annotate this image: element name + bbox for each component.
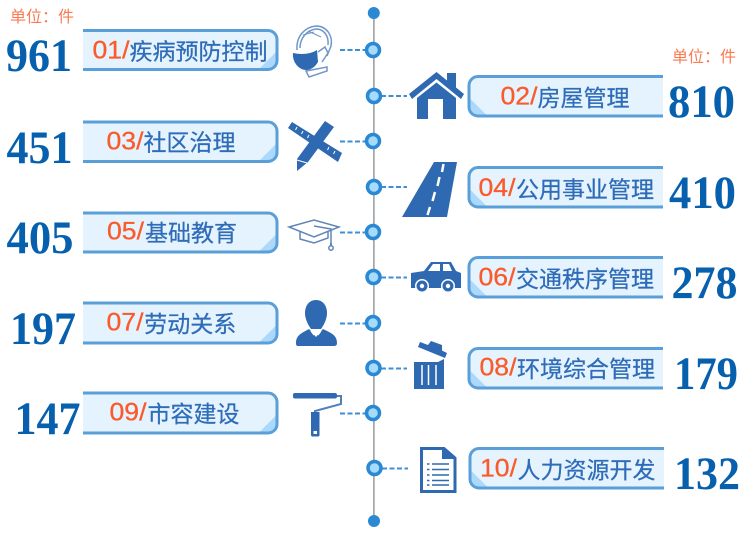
node 01 (366, 44, 380, 56)
pill 01: 01/ (92, 36, 130, 64)
pill 07: 劳动关系 (144, 311, 236, 337)
icon: trash can (414, 341, 447, 389)
pill 03 (83, 122, 277, 162)
pill 06: 06/ (478, 264, 516, 292)
timeline spine (368, 7, 380, 527)
icon: house (409, 72, 464, 119)
connector 10 (382, 468, 408, 470)
icon: person (296, 300, 337, 346)
node 06 (367, 270, 380, 284)
node 07 (366, 316, 380, 330)
node 09 (366, 406, 380, 420)
item 05 (6, 212, 380, 264)
value 961: 961 (6, 30, 72, 82)
pill 02 (469, 76, 663, 116)
pill 03: 社区治理 (144, 130, 236, 156)
pill 08 (469, 348, 663, 388)
icon: face mask (293, 26, 331, 77)
unit label left: 单位：件 (10, 8, 74, 26)
value 405: 405 (6, 212, 74, 264)
value 278: 278 (672, 257, 738, 309)
value 147: 147 (14, 393, 80, 445)
icon: document (422, 447, 456, 492)
pill 10: 10/ (480, 455, 517, 483)
item 06 (367, 257, 738, 309)
pill 10 (470, 448, 664, 488)
connector 02 (381, 95, 407, 97)
pill 06: 交通秩序管理 (516, 266, 654, 292)
connector 05 (340, 232, 366, 234)
value 179: 179 (674, 348, 738, 400)
pill 01 (83, 30, 277, 70)
item 04 (368, 162, 736, 219)
item 07 (10, 300, 380, 355)
icon: graduation cap (289, 220, 339, 250)
node 05 (366, 226, 380, 238)
value 451: 451 (6, 122, 72, 174)
pill 06 (469, 258, 663, 297)
pill 04: 04/ (478, 174, 516, 202)
value 132: 132 (674, 448, 740, 500)
pill 07: 07/ (106, 309, 144, 337)
pill 07 (83, 303, 277, 343)
node 08 (367, 362, 380, 374)
unit label right: 单位：件 (672, 48, 736, 66)
item 02 (368, 72, 735, 128)
pill 02: 02/ (500, 83, 538, 111)
item 03 (6, 121, 380, 174)
pill 02: 房屋管理 (538, 85, 630, 111)
value 410: 410 (669, 167, 736, 219)
node 04 (368, 180, 380, 194)
pill 08: 环境综合管理 (517, 356, 655, 382)
value 197: 197 (10, 303, 76, 355)
connector 09 (340, 412, 366, 414)
node 03 (366, 134, 380, 148)
pill 05: 05/ (107, 218, 144, 246)
pill 05 (83, 213, 277, 252)
item 09 (14, 393, 380, 445)
item 10 (368, 447, 740, 500)
node 02 (368, 90, 380, 102)
icon: paint roller (293, 393, 341, 436)
connector 07 (340, 322, 366, 324)
pill 04: 公用事业管理 (516, 176, 654, 202)
connector 01 (340, 49, 366, 51)
pill 05: 基础教育 (145, 220, 237, 246)
connector 08 (381, 368, 407, 370)
node 10 (368, 462, 381, 474)
pill 03: 03/ (106, 127, 144, 155)
pill 09: 09/ (110, 399, 147, 427)
icon: road (402, 162, 457, 217)
connector 03 (340, 140, 366, 142)
connector 06 (381, 276, 407, 278)
pill 10: 人力资源开发 (518, 457, 656, 483)
icon: car (411, 262, 461, 293)
item 08 (367, 341, 738, 400)
pill 04 (469, 168, 663, 207)
pill 09: 市容建设 (148, 401, 240, 427)
value 810: 810 (668, 76, 735, 128)
pill 01: 疾病预防控制 (130, 39, 268, 65)
connector 04 (381, 186, 407, 188)
icon: ruler and pencil (288, 121, 342, 171)
item 01 (6, 26, 380, 82)
pill 09 (83, 393, 277, 433)
pill 08: 08/ (480, 354, 517, 382)
